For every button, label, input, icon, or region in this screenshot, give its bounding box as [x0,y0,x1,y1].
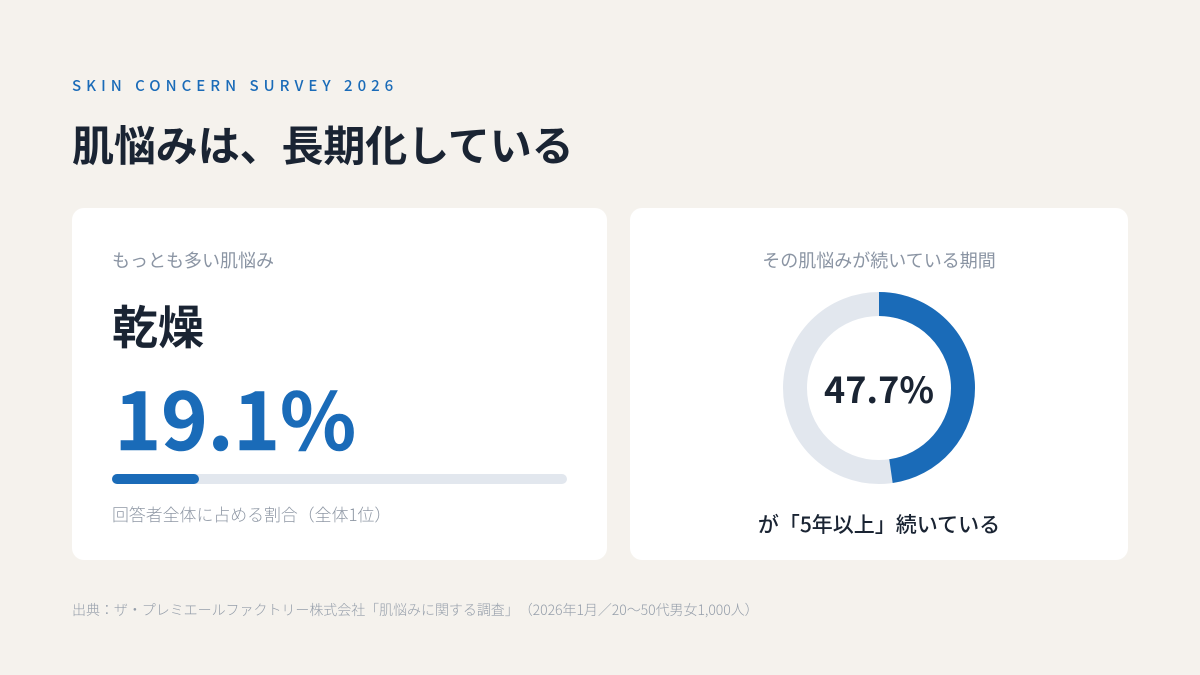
bar caption: 回答者全体に占める割合（全体1位） [112,501,391,526]
eyebrow label: SKIN CONCERN SURVEY 2026 [72,75,398,96]
panel: most common concern [72,208,607,560]
progress bar [112,474,567,484]
donut chart [783,292,975,484]
concern name: 乾燥 [112,292,204,358]
source note: 出典：ザ・プレミエールファクトリー株式会社「肌悩みに関する調査」（2026年1月／20〜50代男女1,000人） [72,600,759,620]
panel: duration [630,208,1128,560]
progress fill [112,474,199,484]
donut value: 47.7% [824,362,934,414]
title: 肌悩みは、長期化している [72,113,574,174]
big percentage: 19.1% [114,358,356,473]
panel label: もっとも多い肌悩み [112,247,274,273]
panel label: その肌悩みが続いている期間 [762,247,996,273]
donut caption: が「5年以上」続いている [758,509,1000,539]
